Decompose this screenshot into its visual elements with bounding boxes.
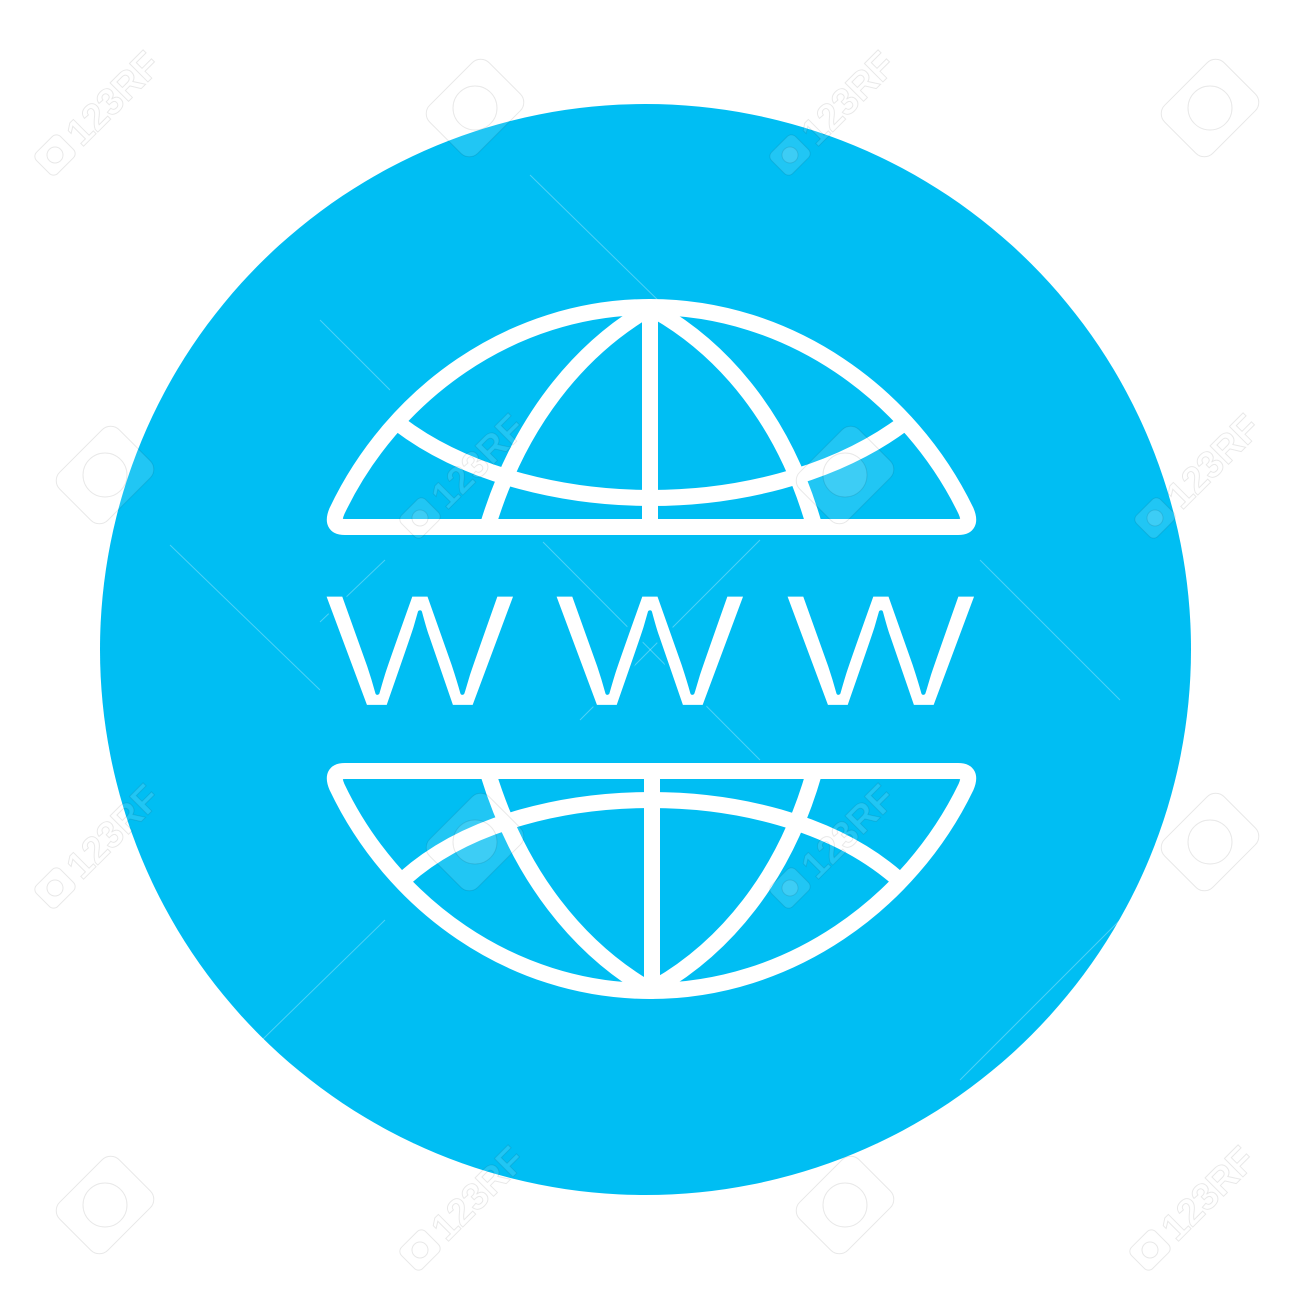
- watermark stamp: [1156, 54, 1264, 162]
- watermark logo: 123RF: [794, 44, 904, 154]
- watermark stamp: [1156, 788, 1264, 896]
- watermark stamp: [51, 1151, 159, 1259]
- globe: upper half: [335, 307, 968, 527]
- watermark stamp: [791, 421, 899, 529]
- watermark stamp: [421, 788, 529, 896]
- WWW label: W: [553, 561, 746, 742]
- watermark logo: [395, 407, 534, 546]
- watermark logo: 123RF: [424, 1139, 534, 1249]
- watermark stamp: [791, 1151, 899, 1259]
- watermark logo: [1130, 407, 1269, 546]
- watermark logo: 123RF: [424, 407, 534, 517]
- WWW label: W: [784, 561, 977, 742]
- watermark logo: [30, 777, 169, 916]
- WWW label: [323, 561, 977, 742]
- watermark logo: [765, 777, 904, 916]
- faint diagonal watermark lines: [170, 175, 1120, 1120]
- watermark logo: 123RF: [794, 777, 904, 887]
- watermark logo: [395, 1139, 534, 1278]
- watermark logo: 123RF: [59, 44, 169, 154]
- watermark logo: [765, 44, 904, 183]
- globe: lower half: [335, 771, 968, 991]
- watermark logo: [30, 44, 169, 183]
- watermark logo: 123RF: [1159, 407, 1269, 517]
- watermark stamp: [421, 54, 529, 162]
- watermark stamp: [51, 421, 159, 529]
- watermark logo: [1125, 1139, 1264, 1278]
- watermark logo: 123RF: [1154, 1139, 1264, 1249]
- blue circle background: [100, 104, 1191, 1195]
- WWW label: W: [323, 561, 516, 742]
- watermark logo: 123RF: [59, 777, 169, 887]
